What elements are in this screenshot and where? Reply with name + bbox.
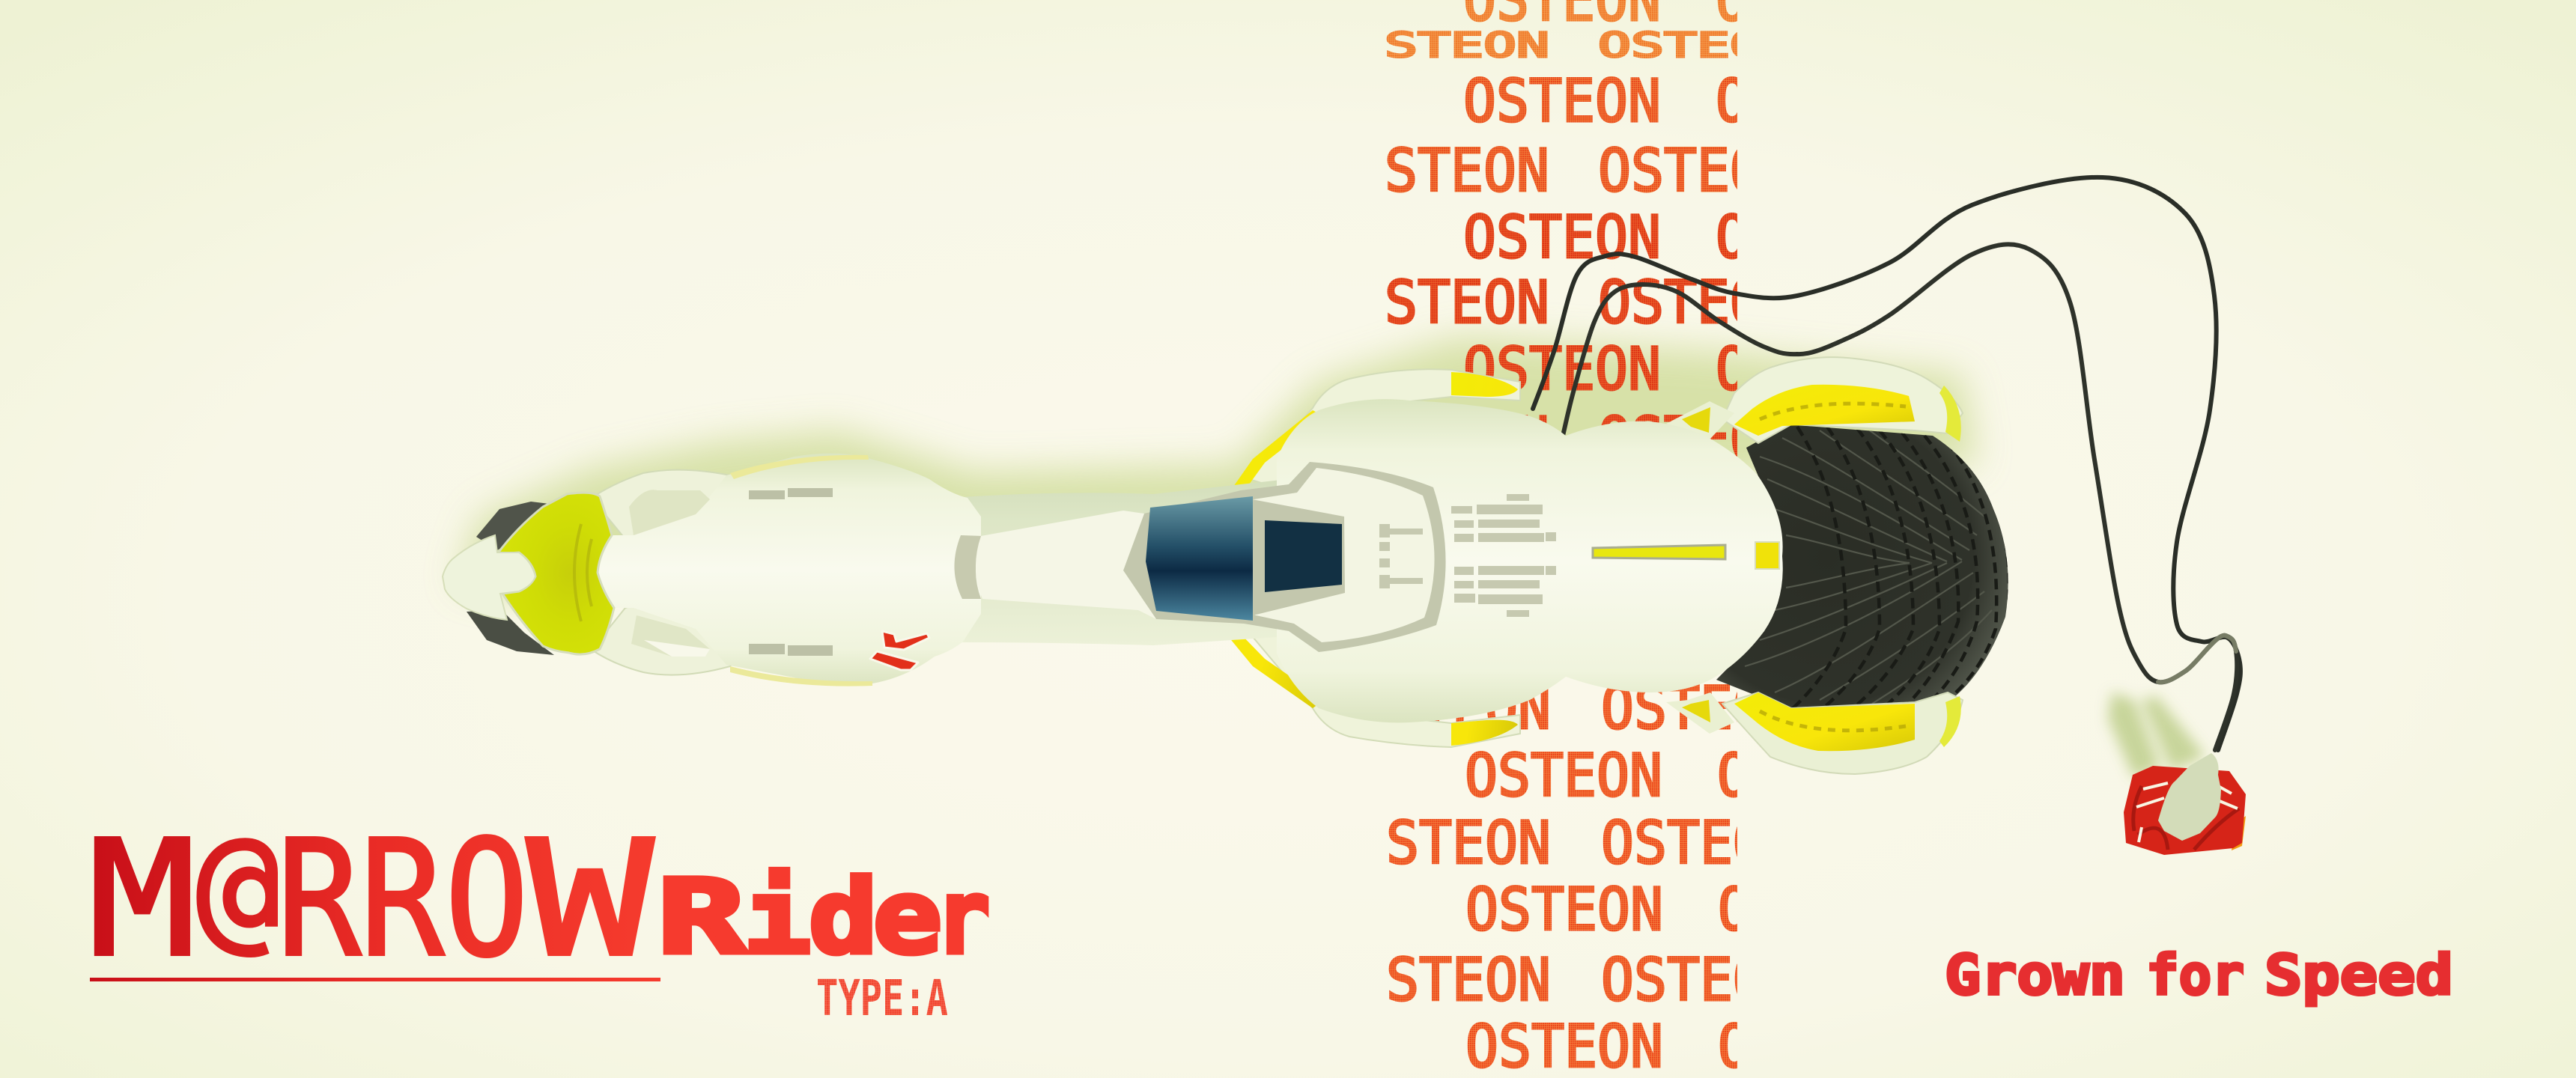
glove folds xyxy=(2133,786,2239,850)
grey window frame xyxy=(1244,498,1345,618)
strong rows: OSTEO xyxy=(1598,270,1763,337)
strong rows: STEON xyxy=(1385,270,1549,337)
strong rows: OSTEO xyxy=(1598,406,1763,473)
title: MARROW wordmark: O xyxy=(445,806,529,993)
hub ribs xyxy=(1760,404,1906,731)
front nose xyxy=(443,535,535,620)
upper rows: OSTEO xyxy=(1598,138,1763,205)
title: MARROW wordmark: M xyxy=(88,806,196,993)
strong rows: STEON xyxy=(1385,406,1549,473)
fender highlight strips xyxy=(730,455,872,686)
top faded rows: STEON xyxy=(1385,25,1549,65)
rear tyre xyxy=(1716,425,2008,707)
linkages xyxy=(1666,401,1734,734)
strong rows xyxy=(1387,213,1737,457)
front tyre bottom xyxy=(467,610,554,655)
upper rows: OSTEON xyxy=(1463,68,1661,135)
strong rows: O xyxy=(1716,204,1749,272)
marquee: OSTEON dot-matrix column xyxy=(1385,0,1766,1078)
lower rows: STEON xyxy=(1386,810,1551,877)
upper cable xyxy=(1533,177,2241,750)
rear pod top xyxy=(1722,357,1963,443)
faded cable section xyxy=(2158,636,2236,682)
centre slot xyxy=(1593,545,1725,559)
rear yellow hub bottom xyxy=(1734,692,1915,751)
front tyre top xyxy=(476,502,562,550)
subtitle: Rider: R xyxy=(657,859,746,977)
top faded rows: OSTEO xyxy=(1598,25,1763,65)
panel details xyxy=(1379,494,1556,617)
title: MARROW wordmark xyxy=(88,805,654,993)
front fork holes xyxy=(629,490,710,535)
lower rows: OSTEON xyxy=(1465,743,1662,810)
white ribbons xyxy=(2136,783,2238,842)
rear light xyxy=(1755,542,1779,569)
lower rows: OSTEO xyxy=(1601,947,1766,1014)
front fork loop bottom xyxy=(592,599,749,675)
front hull xyxy=(599,453,981,686)
fender ribs xyxy=(574,524,592,621)
tagline: Speed xyxy=(2264,943,2453,1008)
lower cable xyxy=(1563,244,2237,750)
subtitle: Rider: r xyxy=(936,859,990,977)
strong rows: OSTEON xyxy=(1463,336,1661,404)
subtitle: Rider: e xyxy=(873,859,942,977)
cone xyxy=(976,511,1156,619)
lower rows: STEON xyxy=(1386,675,1551,743)
cockpit dome xyxy=(1249,468,1435,642)
tagline: for xyxy=(2146,943,2244,1008)
tagline xyxy=(1945,943,2453,1008)
subtitle: Rider xyxy=(657,859,990,977)
glove with grip xyxy=(2108,692,2246,855)
wing tip yellow xyxy=(1451,372,1518,746)
lower rows: O xyxy=(1718,877,1751,944)
top faded rows xyxy=(1387,0,1737,58)
main rear hull xyxy=(1277,399,1783,722)
tagline: Grown xyxy=(1945,943,2125,1008)
grip body xyxy=(2158,753,2221,841)
rear pod end caps xyxy=(1939,386,1961,747)
upper rows xyxy=(1387,76,1737,193)
upper rows: STEON xyxy=(1385,138,1549,205)
upper rows: O xyxy=(1716,68,1749,135)
cables xyxy=(1533,177,2241,750)
canopy window xyxy=(1146,496,1253,621)
tread pattern xyxy=(1745,427,1992,704)
wing arm top xyxy=(1249,369,1520,487)
title: MARROW wordmark: @ xyxy=(196,805,280,967)
logo mark xyxy=(870,631,929,670)
rear yellow hub top xyxy=(1734,385,1915,436)
front fork loop top xyxy=(592,470,749,550)
front fender xyxy=(497,493,614,654)
tread blocks xyxy=(1790,427,2009,711)
cone collar xyxy=(954,535,982,599)
lower rows: STEON xyxy=(1386,947,1551,1014)
glove shadow xyxy=(2108,692,2205,779)
title: MARROW wordmark: R xyxy=(277,806,361,993)
strong rows: OSTEON xyxy=(1463,204,1661,272)
strong rows: O xyxy=(1716,336,1749,404)
red glove xyxy=(2124,766,2246,855)
lower rows: OSTEO xyxy=(1601,675,1766,743)
bike body xyxy=(443,357,1963,774)
lower rows: OSTEO xyxy=(1601,810,1766,877)
lower rows: OSTEON xyxy=(1465,877,1663,944)
subtitle: Rider: d xyxy=(809,859,878,977)
bike cast shadow xyxy=(457,337,1977,599)
front panel details xyxy=(749,488,833,656)
neck xyxy=(951,479,1288,645)
subtitle: Rider: i xyxy=(744,859,811,977)
lower rows xyxy=(1388,684,1737,1069)
orange edge xyxy=(2232,816,2246,850)
cockpit dome rim xyxy=(1123,462,1446,652)
type label: TYPE:A xyxy=(816,969,948,1027)
title: MARROW wordmark: R xyxy=(360,806,444,993)
wing yellow strips xyxy=(1228,410,1324,708)
rear pod bottom xyxy=(1722,692,1963,774)
rear window xyxy=(1265,520,1342,592)
wing arm bottom xyxy=(1249,629,1520,747)
lower rows: O xyxy=(1717,743,1750,810)
title: MARROW wordmark: W xyxy=(526,806,654,993)
title underline xyxy=(90,978,660,981)
